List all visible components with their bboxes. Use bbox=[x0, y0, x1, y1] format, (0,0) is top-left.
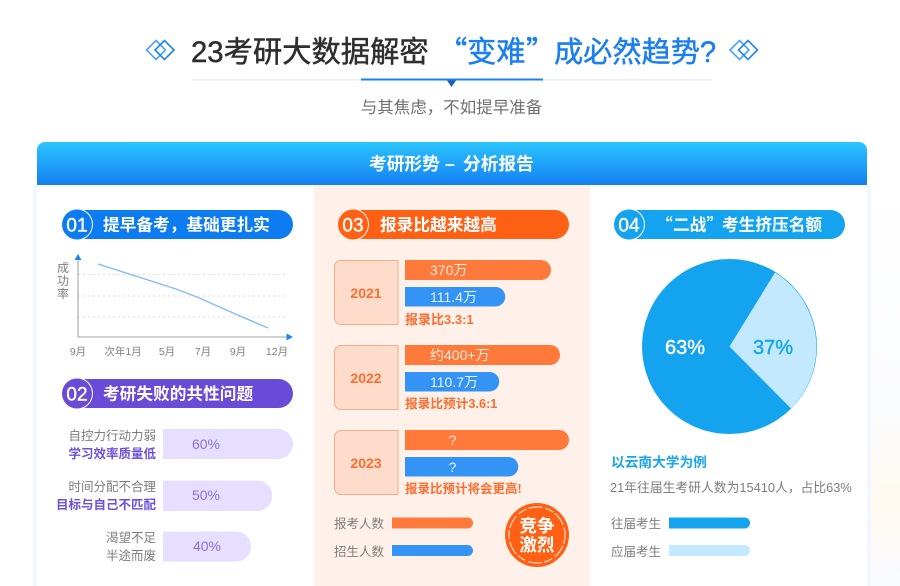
heading 04: “ bbox=[656, 212, 673, 236]
heading 03: 03 bbox=[342, 216, 364, 236]
header banner: – bbox=[445, 154, 455, 174]
title: “ bbox=[438, 29, 467, 71]
header banner: 考研形势 bbox=[369, 154, 440, 174]
pie chart: 63% and 37%: 63% bbox=[665, 337, 705, 359]
example heading: 以云南大学为例 bbox=[611, 454, 707, 470]
heading 04: ” bbox=[706, 212, 723, 236]
year group: 2022: 约400+万 bbox=[430, 347, 490, 363]
year group: 2021: 370万 bbox=[430, 262, 467, 278]
legend: repeat and fresh candidates: 往届考生 bbox=[611, 516, 661, 531]
bar: 40% bbox=[106, 530, 251, 563]
heading 01: 01 bbox=[66, 216, 88, 236]
heading 04: 考生挤压名额 bbox=[722, 212, 822, 236]
heading 04: 二战 bbox=[673, 212, 707, 236]
line chart: success rate: 7月 bbox=[195, 346, 211, 358]
bar: 50%: 时间分配不合理 bbox=[68, 479, 156, 494]
title: ” bbox=[526, 29, 555, 71]
bar: 60%: 自控力行动力弱 bbox=[68, 429, 156, 443]
bar: 50%: 目标与自己不匹配 bbox=[56, 497, 156, 512]
year group: 2022: 110.7万 bbox=[430, 374, 478, 390]
year group: 2022: 报录比预计3.6:1 bbox=[405, 397, 497, 411]
heading 02: 考研失败的共性问题 bbox=[103, 384, 253, 404]
panel: 04 second-attempt candidates bbox=[610, 208, 852, 559]
year group: 2023: 2023 bbox=[350, 455, 382, 471]
bar: 40%: 40% bbox=[193, 538, 221, 554]
bar: 40%: 半途而废 bbox=[106, 548, 156, 563]
panel: 03 admission ratio bbox=[334, 208, 569, 567]
year group: 2023 bbox=[334, 430, 569, 496]
bar: 60%: 学习效率质量低 bbox=[68, 446, 156, 461]
heading 03: 报录比越来越高 bbox=[380, 214, 497, 234]
title: 变难 bbox=[467, 29, 526, 71]
line chart: success rate: 成 bbox=[57, 261, 69, 275]
legend: repeat and fresh candidates: 应届考生 bbox=[611, 544, 661, 559]
legend: repeat and fresh candidates bbox=[611, 516, 750, 559]
stamp: fierce competition: 激烈 bbox=[520, 535, 554, 555]
heading 04: 04 bbox=[618, 216, 640, 236]
line chart: success rate: 12月 bbox=[266, 346, 288, 358]
header banner: 分析报告 bbox=[463, 154, 534, 174]
line chart: success rate: 功 bbox=[57, 274, 69, 288]
heading 03 bbox=[337, 208, 569, 240]
bar: 60% bbox=[68, 429, 293, 461]
title: 23考研大数据解密 bbox=[191, 36, 429, 69]
heading 01: 提早备考，基础更扎实 bbox=[103, 214, 270, 234]
year group: 2023: ? bbox=[449, 432, 457, 448]
subtitle: 与其焦虑，不如提早准备 bbox=[361, 98, 543, 117]
line chart: success rate bbox=[57, 254, 293, 358]
line chart: success rate: 5月 bbox=[159, 346, 175, 358]
stamp: fierce competition bbox=[505, 503, 569, 567]
panel: report body bbox=[33, 185, 871, 586]
title bbox=[191, 29, 716, 71]
bar: 60%: 60% bbox=[192, 436, 220, 452]
heading 02 bbox=[61, 378, 293, 410]
title: 成必然趋势? bbox=[554, 36, 716, 69]
bar: 40%: 渴望不足 bbox=[106, 530, 156, 545]
heading 04 bbox=[613, 208, 845, 240]
pie chart: 63% and 37%: 37% bbox=[753, 337, 793, 359]
pie chart: 63% and 37% bbox=[642, 259, 817, 434]
stamp: fierce competition: 竞争 bbox=[520, 516, 554, 536]
line chart: success rate: 9月 bbox=[70, 346, 86, 358]
legend: applicants and admissions: 招生人数 bbox=[334, 544, 385, 559]
year group: 2022: 2022 bbox=[350, 370, 382, 386]
header banner bbox=[37, 142, 867, 185]
year group: 2021 bbox=[334, 260, 551, 327]
panel: 02 common failure problems bbox=[56, 378, 293, 563]
icon: left double diamond bbox=[146, 40, 174, 60]
bar: 50% bbox=[56, 479, 272, 512]
heading 02: 02 bbox=[66, 384, 88, 406]
year group: 2022 bbox=[334, 345, 560, 411]
bar: 50%: 50% bbox=[192, 487, 220, 503]
legend: applicants and admissions bbox=[334, 516, 473, 559]
heading 01 bbox=[61, 208, 293, 240]
year group: 2021: 报录比3.3:1 bbox=[405, 312, 474, 327]
legend: applicants and admissions: 报考人数 bbox=[334, 516, 385, 531]
line chart: success rate: 率 bbox=[57, 286, 69, 301]
year group: 2021: 111.4万 bbox=[430, 289, 477, 305]
year group: 2021: 2021 bbox=[350, 285, 382, 301]
panel: 01 prepare early bbox=[57, 208, 293, 358]
year group: 2023: ? bbox=[449, 459, 457, 475]
line chart: success rate: 9月 bbox=[230, 346, 246, 358]
year group: 2023: 报录比预计将会更高! bbox=[405, 481, 522, 496]
example description: 21年往届生考研人数为15410人，占比63% bbox=[610, 480, 852, 495]
title underline with pointer bbox=[192, 78, 712, 87]
line chart: success rate: 次年1月 bbox=[104, 345, 142, 358]
icon: right double diamond bbox=[730, 40, 758, 60]
